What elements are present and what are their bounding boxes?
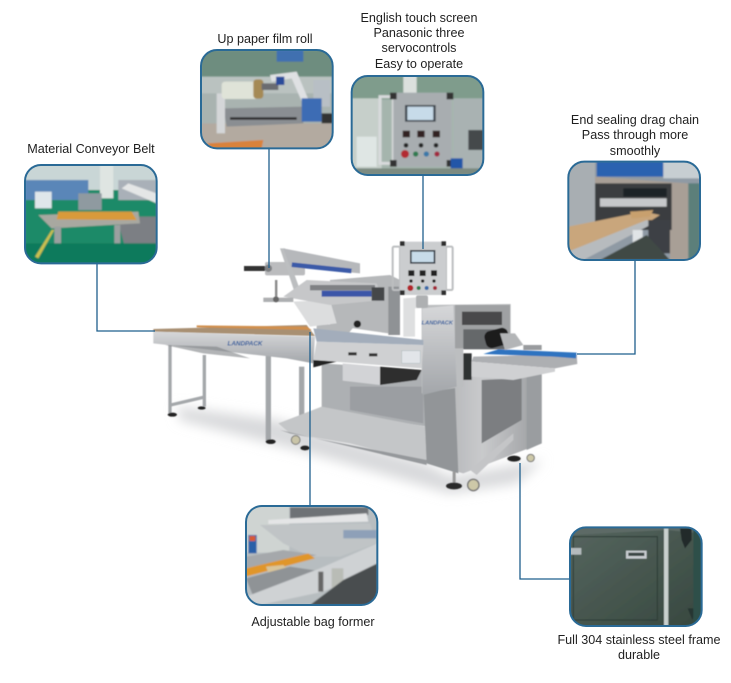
connector line: end sealing — [577, 260, 635, 354]
label: material conveyor belt: Material Conveyor Belt — [27, 142, 155, 156]
label: touch screen and servo controls: servocontrols — [382, 41, 456, 55]
label: end sealing drag chain: Pass through more — [582, 128, 688, 142]
main machine: flow wrapper with infeed conveyor: LANDPACK — [422, 321, 454, 327]
panel: touch screen control photo — [352, 76, 483, 175]
central housing — [422, 304, 511, 393]
panel: up paper film roll photo — [201, 50, 333, 148]
panel: stainless steel frame photo — [570, 527, 702, 626]
label: touch screen and servo controls: English touch screen — [361, 11, 477, 25]
label: full 304 stainless steel frame: durable — [618, 648, 660, 662]
label: touch screen and servo controls: Panasonic three — [373, 26, 465, 40]
infeed conveyor legs — [168, 345, 310, 450]
machine base and cabinet — [322, 363, 427, 427]
connector line: conveyor belt — [97, 262, 155, 331]
label: full 304 stainless steel frame: Full 304 stainless steel frame — [557, 633, 721, 647]
panel: adjustable bag former photo — [246, 506, 377, 605]
connector line: steel frame — [520, 463, 571, 579]
label: end sealing drag chain: smoothly — [610, 144, 661, 158]
main machine: flow wrapper with infeed conveyor: LANDPACK — [227, 340, 263, 347]
infeed table — [153, 325, 315, 336]
label: touch screen and servo controls — [361, 11, 477, 71]
connector line: bag former — [309, 332, 311, 507]
connector line: film roll — [268, 147, 270, 268]
label: end sealing drag chain — [571, 113, 699, 158]
label: full 304 stainless steel frame — [557, 633, 721, 662]
control box arm — [403, 297, 427, 337]
panel: end sealing drag chain photo — [568, 162, 700, 260]
former and forming table — [313, 342, 423, 368]
label: adjustable bag former: Adjustable bag former — [251, 615, 375, 629]
film roll frame — [330, 275, 400, 335]
connector line: touch screen — [422, 174, 424, 249]
outfeed conveyor — [472, 354, 577, 368]
label: touch screen and servo controls: Easy to operate — [375, 57, 463, 71]
control panel — [393, 241, 453, 295]
label: up paper film roll: Up paper film roll — [217, 32, 313, 46]
label: end sealing drag chain: End sealing drag chain — [571, 113, 699, 127]
panel: material conveyor belt photo — [25, 165, 157, 263]
floor shadow — [177, 407, 543, 493]
side cabinet — [423, 373, 542, 473]
main machine: flow wrapper with infeed conveyor — [153, 241, 577, 493]
